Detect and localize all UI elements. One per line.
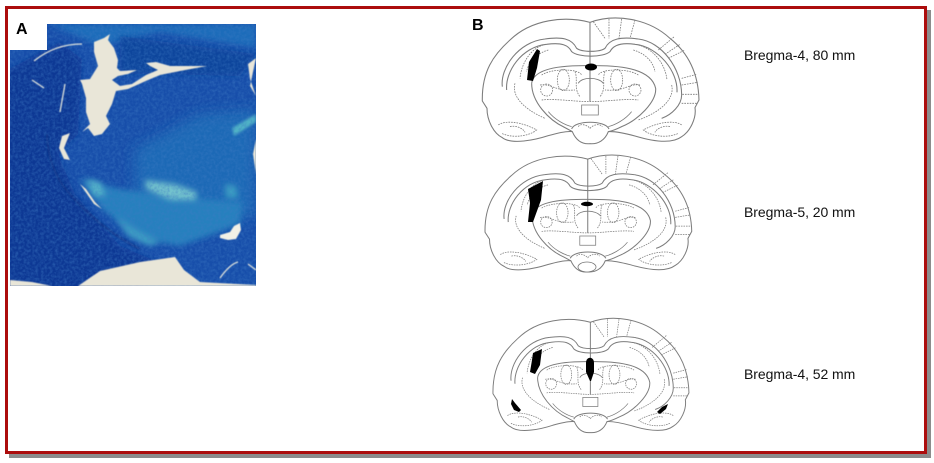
lesion 3 midline bbox=[586, 358, 594, 381]
ventral pale blob bbox=[578, 262, 596, 272]
brain section 2 bbox=[485, 155, 692, 272]
lesion 1 left bbox=[527, 49, 540, 81]
white corner cut-out bbox=[10, 24, 47, 50]
caption: Bregma-4, 80 mm: Bregma-4, 80 mm bbox=[744, 47, 855, 63]
brain section 1 bbox=[482, 18, 699, 144]
label A: A bbox=[16, 21, 28, 38]
lesion 3 ventrolateral left bbox=[511, 399, 521, 412]
label B: B bbox=[472, 17, 484, 34]
lesion 2 left bbox=[528, 181, 543, 222]
lesion 1 midline bbox=[585, 64, 597, 70]
panel A: stained brain section bbox=[10, 24, 256, 286]
thin dark arc bbox=[59, 179, 140, 250]
caption: Bregma-4, 52 mm: Bregma-4, 52 mm bbox=[744, 366, 855, 382]
brain section 3 bbox=[493, 318, 689, 433]
lesion 3 ventrolateral right bbox=[657, 404, 668, 414]
pale streaks bbox=[145, 180, 197, 200]
fine tissue texture bbox=[10, 24, 256, 286]
central lighter region bbox=[135, 109, 256, 234]
dark blue left lobe bbox=[10, 42, 153, 286]
lesion 2 midline bbox=[581, 202, 593, 206]
upper band bbox=[50, 24, 256, 48]
lesion 3 left bbox=[530, 349, 542, 374]
tissue tears bbox=[10, 34, 256, 286]
caption: Bregma-5, 20 mm: Bregma-5, 20 mm bbox=[744, 204, 855, 220]
